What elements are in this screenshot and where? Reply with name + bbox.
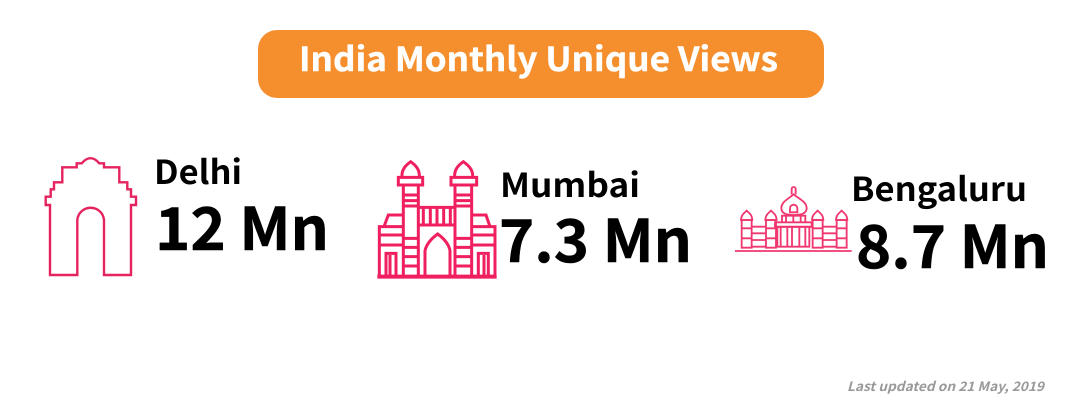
- title banner: India Monthly Unique Views: [299, 33, 778, 81]
- Mumbai label: Mumbai: [500, 159, 640, 207]
- Delhi value: 12 Mn: [155, 182, 329, 267]
- last updated note: Last updated on 21 May, 2019: [847, 376, 1046, 395]
- icon: India Gate: [46, 158, 136, 275]
- Bengaluru value: 8.7 Mn: [856, 200, 1049, 285]
- panel: Bengaluru: [735, 163, 1049, 285]
- icon: Gateway of India: [377, 162, 497, 277]
- panel: Delhi: [46, 146, 329, 275]
- Mumbai value: 7.3 Mn: [499, 194, 692, 279]
- panel: Mumbai: [377, 159, 692, 279]
- Delhi label: Delhi: [154, 146, 242, 194]
- Bengaluru label: Bengaluru: [851, 163, 1027, 211]
- icon: Vidhana Soudha: [735, 187, 852, 251]
- title banner: [258, 30, 824, 98]
